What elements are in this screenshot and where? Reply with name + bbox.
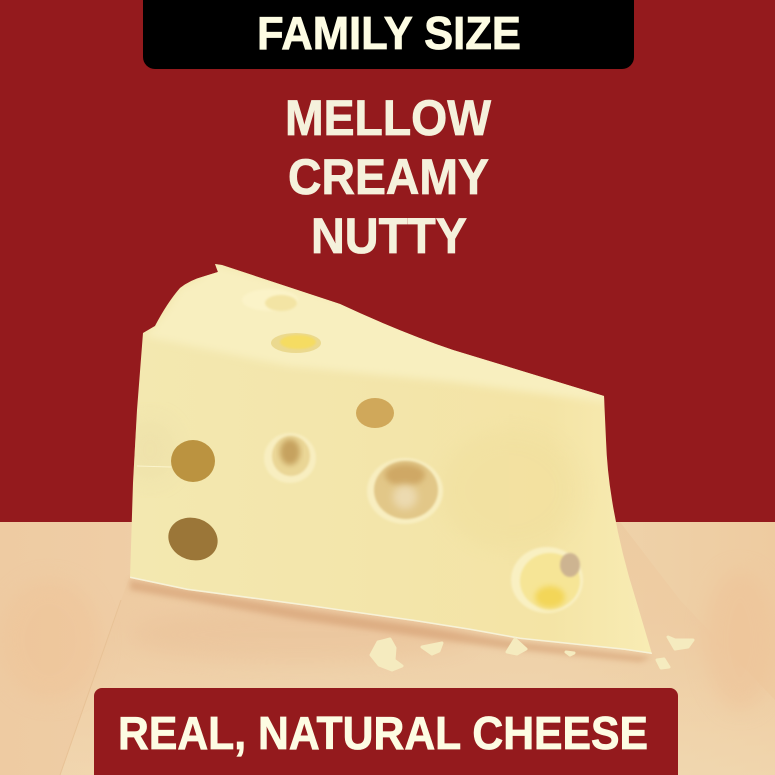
hole 4: left upper (171, 440, 215, 482)
cheese top face (143, 264, 610, 402)
cheese crust edge (130, 578, 652, 654)
word: mellow: MELLOW (285, 89, 491, 146)
hole 2: top surface yellow (271, 333, 321, 353)
bottom banner text: REAL, NATURAL CHEESE (118, 707, 648, 759)
banner text: FAMILY SIZE (257, 7, 521, 59)
background: wooden table (0, 522, 775, 775)
cheese crumbs (371, 637, 693, 670)
hole 7: left lower dark (163, 511, 223, 567)
cheese body (130, 264, 652, 654)
hole 6: large shallow (367, 458, 443, 524)
flavor words (285, 89, 491, 264)
hole 5: shallow middle (264, 433, 316, 483)
word: nutty: NUTTY (311, 207, 467, 264)
background: red wall (0, 0, 775, 522)
cheese wedge (125, 264, 652, 654)
hole 3: small amber (356, 398, 394, 428)
top banner (143, 0, 634, 69)
word: creamy: CREAMY (288, 148, 489, 205)
bottom banner (94, 688, 678, 775)
cheese shadow on table (130, 580, 652, 662)
hole 1: top surface (242, 289, 298, 311)
hole 8: lower right yellow (511, 547, 583, 613)
